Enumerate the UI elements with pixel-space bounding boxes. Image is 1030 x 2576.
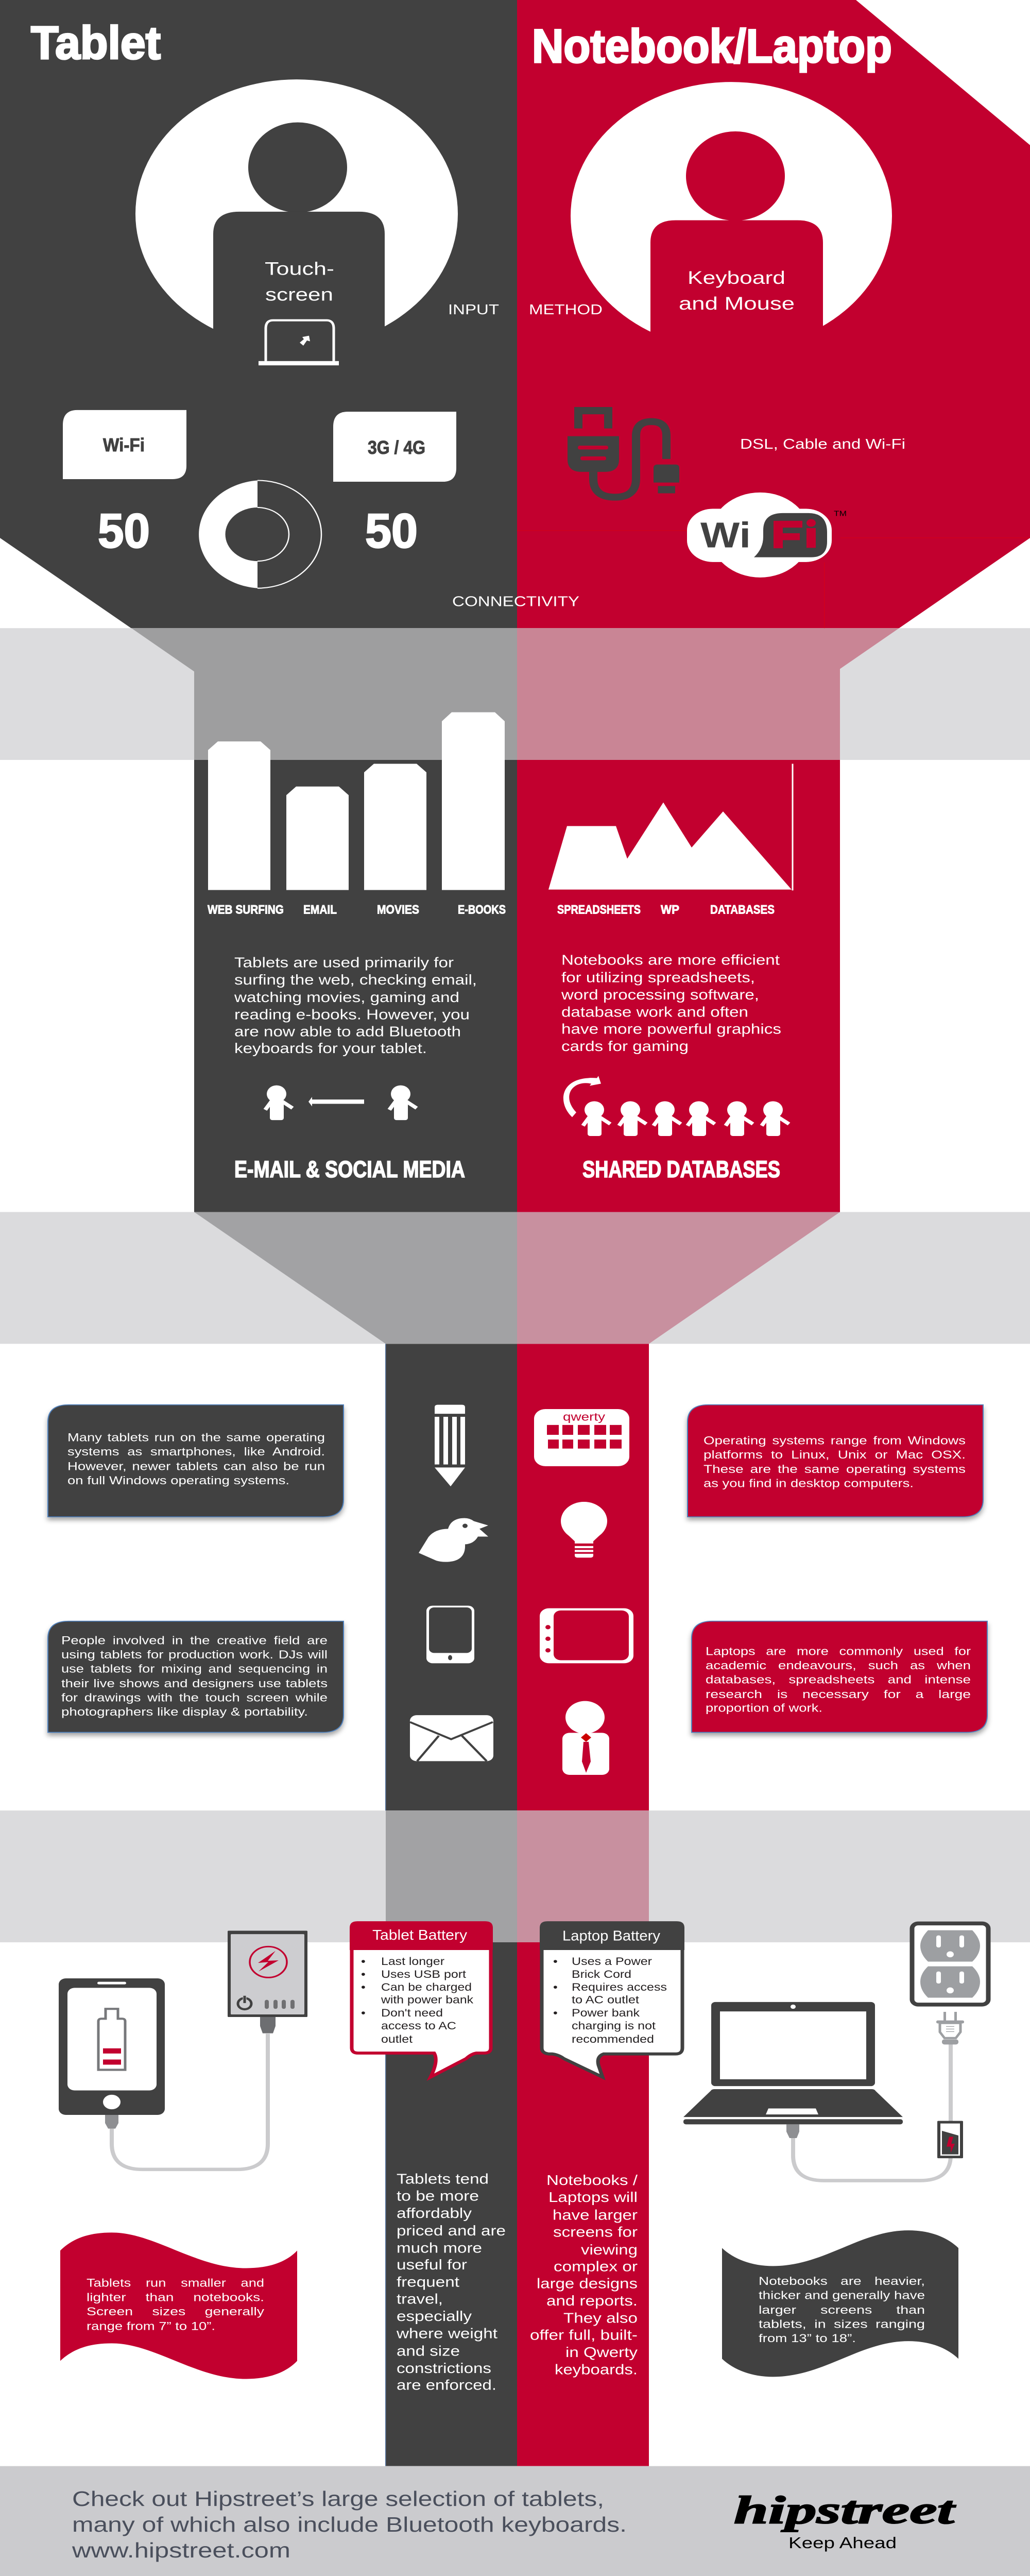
icon: tablet device with cursor xyxy=(259,320,339,365)
panel: notebook operating systems: These are the same operating systems xyxy=(703,1463,966,1476)
footer call to action: www.hipstreet.com xyxy=(72,2538,290,2562)
text block: notebook screens: in Qwerty xyxy=(565,2345,638,2360)
callout: Tablet Battery xyxy=(350,1921,493,2077)
panel: tablet operating systems xyxy=(48,1405,344,1517)
footer call to action: many of which also include Bluetooth keyboards. xyxy=(72,2513,627,2536)
callout: Laptop Battery: to AC outlet xyxy=(572,1993,640,2006)
faint guide lines in red panel xyxy=(517,530,1030,628)
text block: notebook screens: Notebooks / xyxy=(546,2173,638,2188)
panel: tablet creative users: photographers like display & portability. xyxy=(61,1706,308,1718)
bar chart labels: WEB SURFING xyxy=(208,903,284,917)
text block: tablet price and travel: priced and are xyxy=(397,2224,506,2239)
icon: Wi-Fi logo xyxy=(687,493,847,578)
text block: tablet usage: reading e-books. However, you xyxy=(234,1007,470,1023)
label: Keyboard and Mouse xyxy=(679,268,795,314)
text block: notebook usage: database work and often xyxy=(561,1005,748,1020)
callout: Laptop Battery: Requires access xyxy=(572,1981,667,1993)
text block: notebook screens: have larger xyxy=(553,2208,638,2223)
text block: tablet price and travel: are enforced. xyxy=(397,2378,496,2393)
card: Wi-Fi: Wi-Fi xyxy=(103,435,145,455)
icon: smartphone with low battery xyxy=(59,1978,165,2129)
text block: tablet price and travel: affordably xyxy=(397,2206,472,2221)
text block: notebook screens: offer full, built- xyxy=(530,2328,638,2343)
callout: Tablet Battery: Can be charged xyxy=(381,1981,472,1993)
value: 50 Wi-Fi: 50 xyxy=(98,504,150,557)
panel: notebook operating systems: Operating systems range from Windows xyxy=(703,1434,966,1447)
panel: laptop academic users: proportion of work. xyxy=(706,1702,822,1715)
section label: CONNECTIVITY: CONNECTIVITY xyxy=(452,594,579,609)
text block: notebook usage: Notebooks are more efficient xyxy=(561,953,780,968)
callout: Tablet Battery: Uses USB port xyxy=(381,1968,467,1980)
callout: Laptop Battery: Uses a Power xyxy=(572,1955,652,1968)
label: INPUT: INPUT xyxy=(448,302,499,317)
grey band 3 xyxy=(0,1810,1030,1942)
icon: Wi-Fi logo: TM xyxy=(834,509,847,518)
icon: tablet device xyxy=(540,1608,633,1663)
text block: notebook screens: screens for xyxy=(553,2225,638,2240)
label: Touch-screen: screen xyxy=(265,285,333,304)
callout: Tablet Battery: access to AC xyxy=(381,2020,456,2032)
label: Keyboard and Mouse: and Mouse xyxy=(679,294,795,314)
text block: tablet usage: surfing the web, checking email, xyxy=(234,972,477,988)
card: 3G / 4G xyxy=(333,412,456,482)
panel: tablet operating systems: Many tablets run on the same operating xyxy=(67,1431,325,1444)
value: 50 3G/4G: 50 xyxy=(365,504,418,557)
text block: notebook screens: Laptops will xyxy=(548,2190,638,2206)
panel: laptop academic users: research is necessary for a large xyxy=(706,1688,971,1701)
background: tablet column xyxy=(0,0,517,1212)
icon: Wi-Fi logo: Wi xyxy=(700,515,751,555)
panel: notebook size wave: tablets, in sizes ranging xyxy=(759,2318,925,2331)
callout: Laptop Battery: charging is not xyxy=(572,2020,656,2032)
icon: cable plug xyxy=(568,407,679,497)
callout: Tablet Battery: • xyxy=(361,1981,366,1993)
callout: Tablet Battery: • xyxy=(361,2007,366,2019)
text block: notebook screens: They also xyxy=(563,2311,638,2326)
text block: tablet usage xyxy=(234,955,477,1057)
text block: notebook usage: cards for gaming xyxy=(561,1039,689,1054)
callout: Laptop Battery: • xyxy=(553,1981,558,1993)
panel: tablet creative users: People involved in the creative field are xyxy=(61,1635,328,1647)
panel: tablet creative users: their live shows and designers use tablets xyxy=(61,1677,328,1690)
panel: laptop academic users: databases, spreadsheets and intense xyxy=(706,1673,971,1686)
label: Touch-screen: Touch- xyxy=(265,259,334,279)
panel: tablet creative users: use tablets for mixing and sequencing in xyxy=(61,1663,328,1675)
text block: notebook screens xyxy=(530,2173,638,2378)
panel: notebook size wave: thicker and generally have xyxy=(759,2289,925,2302)
text block: tablet price and travel: and size xyxy=(397,2344,460,2359)
icon: one-to-one email people xyxy=(265,1086,417,1120)
text block: tablet usage: keyboards for your tablet. xyxy=(234,1041,427,1057)
panel: notebook size wave xyxy=(722,2230,958,2377)
text block: tablet price and travel: much more xyxy=(397,2241,482,2256)
text block: notebook usage: for utilizing spreadsheets, xyxy=(561,970,755,986)
logo: hipstreet: hipstreet xyxy=(734,2489,956,2532)
heading: SHARED DATABASES: SHARED DATABASES xyxy=(582,1156,780,1182)
panel: tablet size wave: range from 7” to 10”. xyxy=(87,2320,215,2333)
callout: Tablet Battery: Tablet Battery xyxy=(372,1927,468,1943)
callout: Tablet Battery: Last longer xyxy=(381,1955,444,1968)
callout: Tablet Battery: with power bank xyxy=(381,1993,474,2006)
text block: tablet price and travel: Tablets tend xyxy=(397,2172,489,2187)
panel: notebook operating systems: platforms to Linux, Unix or Mac OSX. xyxy=(703,1449,966,1461)
icon: laptop xyxy=(683,2002,903,2138)
area chart labels xyxy=(557,903,775,917)
label: METHOD: METHOD xyxy=(529,302,603,317)
lower column: tablet xyxy=(386,1344,517,2466)
title: Notebook/Laptop: Notebook/Laptop xyxy=(532,20,892,73)
text block: tablet price and travel: frequent xyxy=(397,2275,460,2290)
icon: smartphone xyxy=(426,1606,474,1663)
callout: Laptop Battery xyxy=(540,1921,684,2077)
bar chart labels: MOVIES xyxy=(377,903,419,917)
panel: tablet operating systems: systems as smartphones, like Android. xyxy=(67,1446,325,1458)
text block: tablet usage: are now able to add Bluetooth xyxy=(234,1024,461,1040)
label: Keyboard and Mouse: Keyboard xyxy=(688,268,785,288)
text block: tablet usage: watching movies, gaming and xyxy=(234,990,459,1005)
callout: Laptop Battery: • xyxy=(553,2007,558,2019)
icon: power plug xyxy=(936,2012,964,2044)
footer call to action: Check out Hipstreet’s large selection of tablets, xyxy=(72,2487,604,2511)
bar chart labels: E-BOOKS xyxy=(458,903,506,917)
text block: tablet usage: Tablets are used primarily for xyxy=(234,955,454,971)
panel: notebook size wave: Notebooks are heavier, xyxy=(759,2275,925,2287)
lower column: notebook xyxy=(517,1344,649,2466)
card: Wi-Fi xyxy=(63,410,186,479)
grey band 1 xyxy=(0,628,1030,760)
text block: tablet price and travel: where weight xyxy=(396,2326,498,2342)
text block: tablet price and travel: constrictions xyxy=(397,2361,491,2376)
bar chart labels: EMAIL xyxy=(303,903,337,917)
bar chart: tablet usage xyxy=(208,712,505,890)
text block: notebook usage: have more powerful graphics xyxy=(561,1022,781,1037)
icon: qwerty keyboard: qwerty xyxy=(563,1411,606,1423)
text block: notebook screens: large designs xyxy=(537,2276,638,2292)
area chart labels: WP xyxy=(661,903,679,917)
label: DSL, Cable and Wi-Fi: DSL, Cable and Wi-Fi xyxy=(740,436,905,452)
bar chart labels xyxy=(208,903,506,917)
panel: tablet size wave xyxy=(60,2232,297,2379)
panel: notebook operating systems xyxy=(688,1405,983,1517)
footer band xyxy=(0,2466,1030,2576)
icon: bird xyxy=(419,1518,488,1562)
panel: laptop academic users: academic endeavours, such as when xyxy=(706,1659,971,1672)
area chart labels: DATABASES xyxy=(710,903,775,917)
callout: Laptop Battery: • xyxy=(553,1955,558,1968)
icon: businessman with tie xyxy=(562,1701,609,1775)
text block: notebook usage xyxy=(561,953,781,1054)
callout: Laptop Battery: Brick Cord xyxy=(572,1968,631,1980)
callout: Laptop Battery: Power bank xyxy=(572,2007,640,2019)
icon: power bank xyxy=(228,1931,307,2033)
icon: shared group of people with arrow xyxy=(563,1076,789,1136)
panel: tablet size wave: lighter than notebooks. xyxy=(87,2292,264,2304)
donut chart 50/50 xyxy=(199,480,321,588)
panel: tablet size wave: Screen sizes generally xyxy=(87,2306,265,2318)
panel: tablet creative users xyxy=(48,1621,344,1732)
text block: tablet price and travel xyxy=(396,2172,506,2393)
input method: notebook user with keyboard and mouse xyxy=(571,82,892,386)
callout: Laptop Battery: Laptop Battery xyxy=(562,1928,661,1944)
logo: hipstreet: Keep Ahead xyxy=(788,2534,897,2552)
panel: tablet size wave: Tablets run smaller and xyxy=(87,2277,264,2290)
text block: notebook usage: word processing software, xyxy=(561,987,759,1003)
callout: Tablet Battery: Don't need xyxy=(381,2007,443,2019)
text block: notebook screens: complex or xyxy=(554,2259,638,2275)
callout: Tablet Battery: • xyxy=(361,1955,366,1968)
card: 3G / 4G: 3G / 4G xyxy=(368,437,425,458)
area chart: notebook usage xyxy=(548,764,793,890)
panel: notebook size wave: from 13” to 18”. xyxy=(759,2332,856,2345)
grey band 2 funnel xyxy=(0,1212,1030,1344)
icon: envelope xyxy=(410,1715,493,1761)
input method: tablet user with touch-screen xyxy=(135,79,458,386)
power cord: laptop to outlet xyxy=(793,2041,951,2180)
panel: tablet creative users: using tablets for production work. DJs will xyxy=(61,1649,328,1662)
icon: pencil xyxy=(435,1405,465,1486)
title: Tablet: Tablet xyxy=(31,18,161,69)
text block: notebook screens: and reports. xyxy=(546,2293,638,2309)
text block: notebook screens: keyboards. xyxy=(555,2362,638,2378)
background: notebook column xyxy=(517,0,1030,1212)
panel: laptop academic users xyxy=(692,1621,987,1732)
label: Touch-screen xyxy=(265,259,334,304)
icon: wall outlet xyxy=(912,1923,988,2005)
text block: notebook screens: viewing xyxy=(581,2242,638,2258)
callout: Tablet Battery: • xyxy=(361,1968,366,1980)
text block: tablet price and travel: especially xyxy=(397,2309,472,2324)
panel: tablet creative users: for drawings with the touch screen while xyxy=(61,1691,328,1704)
icon: qwerty keyboard xyxy=(534,1409,629,1466)
panel: tablet operating systems: on full Windows operating systems. xyxy=(67,1475,289,1487)
footer call to action xyxy=(72,2487,627,2562)
panel: laptop academic users: Laptops are more commonly used for xyxy=(706,1645,971,1658)
panel: tablet operating systems: However, newer tablets can also be run xyxy=(67,1460,325,1473)
text block: tablet price and travel: travel, xyxy=(397,2292,443,2307)
column edge xyxy=(385,1344,386,2466)
panel: notebook operating systems: as you find in desktop computers. xyxy=(703,1478,914,1490)
area chart labels: SPREADSHEETS xyxy=(557,903,641,917)
text block: tablet price and travel: to be more xyxy=(397,2189,479,2204)
text block: tablet price and travel: useful for xyxy=(397,2257,467,2273)
icon: light bulb xyxy=(561,1502,607,1557)
panel: notebook size wave: larger screens than xyxy=(759,2304,925,2316)
callout: Laptop Battery: recommended xyxy=(572,2033,654,2045)
callout: Tablet Battery: outlet xyxy=(381,2033,413,2045)
power cord: phone to power bank xyxy=(112,2034,268,2170)
heading: E-MAIL & SOCIAL MEDIA: E-MAIL & SOCIAL MEDIA xyxy=(234,1156,465,1182)
icon: power brick xyxy=(937,2121,963,2158)
logo: hipstreet xyxy=(734,2489,956,2552)
